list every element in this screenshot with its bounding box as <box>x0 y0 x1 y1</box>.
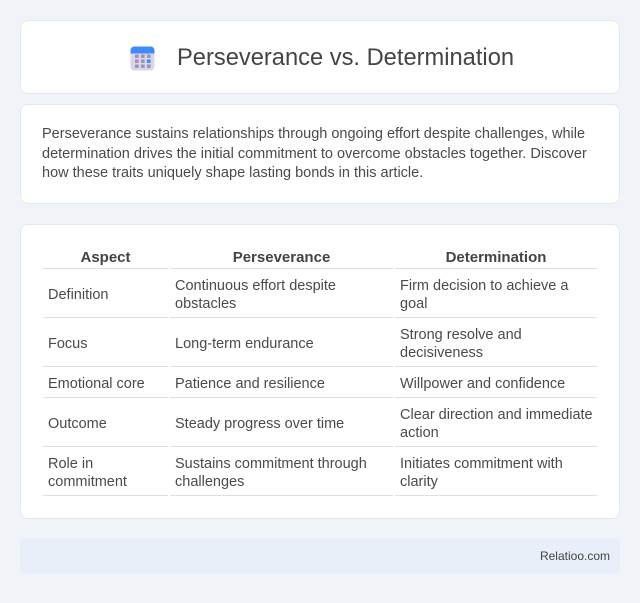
row: definition: Firm decision to achieve a <box>400 278 568 294</box>
row: focus: Long-term endurance <box>175 336 314 352</box>
row: definition: goal <box>400 296 427 312</box>
row: outcome: action <box>400 425 439 441</box>
intro text: how these traits uniquely shape lasting bonds in this article. <box>42 165 423 181</box>
row: focus: decisiveness <box>400 345 483 361</box>
row: outcome <box>48 407 593 441</box>
row: emotional core: Emotional core <box>48 376 145 392</box>
row: role in commitment <box>48 456 563 490</box>
panel: comparison table <box>20 224 620 519</box>
row: outcome: Steady progress over time <box>175 416 344 432</box>
footer credit: Relatioo.com <box>540 549 610 563</box>
table header: Determination <box>446 249 546 266</box>
row: definition <box>48 278 568 312</box>
row: outcome: Outcome <box>48 416 107 432</box>
panel: introduction <box>20 104 620 204</box>
icon: calendar <box>130 46 154 70</box>
row: role in commitment: Role in <box>48 456 93 472</box>
intro text <box>42 126 587 181</box>
footer bar <box>20 539 620 573</box>
row: role in commitment: commitment <box>48 474 127 490</box>
table header: Aspect <box>80 249 131 266</box>
row: emotional core <box>48 376 565 392</box>
row: outcome: Clear direction and immediate <box>400 407 593 423</box>
row: definition: Continuous effort despite <box>175 278 336 294</box>
row: definition: Definition <box>48 287 108 303</box>
row: emotional core: Willpower and confidence <box>400 376 565 392</box>
intro text: Perseverance sustains relationships through ongoing effort despite challenges, while <box>42 126 585 142</box>
row: focus: Strong resolve and <box>400 327 522 343</box>
row: role in commitment: clarity <box>400 474 438 490</box>
row: focus <box>48 327 522 361</box>
panel: title card <box>20 20 620 94</box>
row: role in commitment: Initiates commitment with <box>400 456 563 472</box>
row: definition: obstacles <box>175 296 236 312</box>
row: role in commitment: challenges <box>175 474 244 490</box>
row: focus: Focus <box>48 336 88 352</box>
table header <box>80 249 546 266</box>
table header: Perseverance <box>233 249 330 266</box>
title: Perseverance vs. Determination <box>177 45 514 71</box>
row: emotional core: Patience and resilience <box>175 376 325 392</box>
intro text: determination drives the initial commitment to overcome obstacles together. Discover <box>42 146 587 162</box>
row: role in commitment: Sustains commitment through <box>175 456 367 472</box>
